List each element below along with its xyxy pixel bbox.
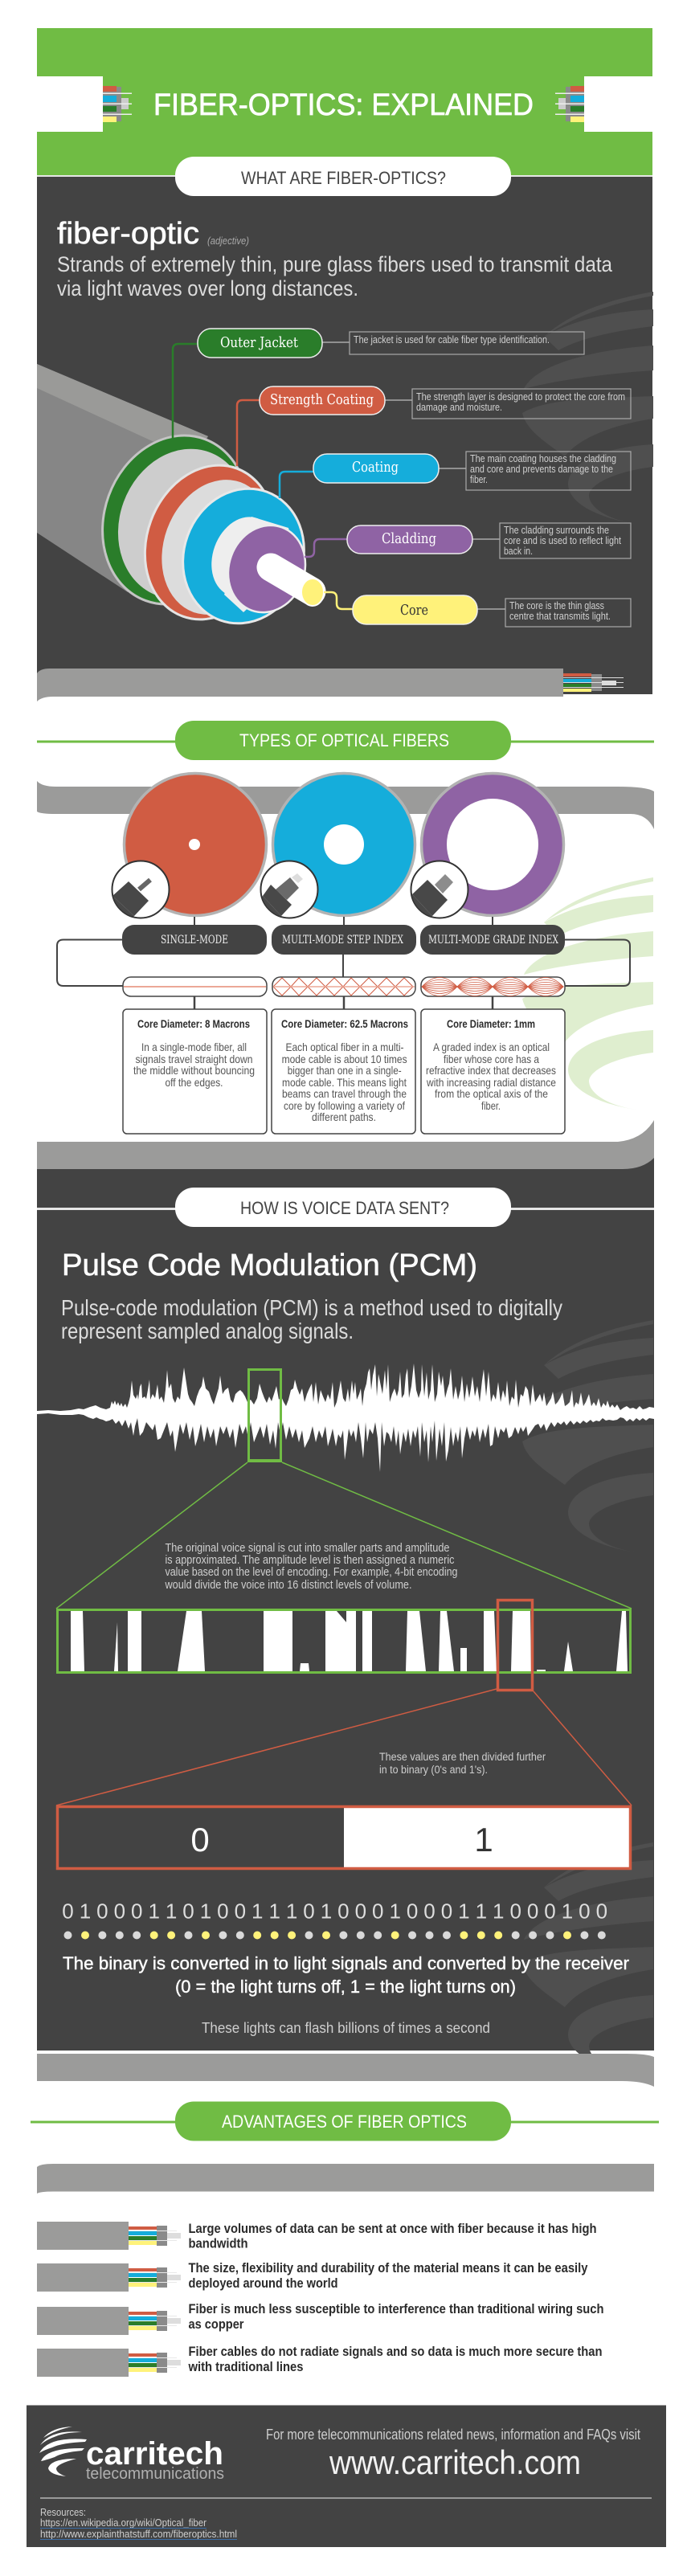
sampled amplitude chart [58,1610,630,1673]
heading: how is voice data sent: HOW IS VOICE DATA SENT? [240,1198,449,1218]
green zoom selection [56,1369,632,1609]
binary digits: 1 [458,1899,470,1924]
resources: Resources: [40,2506,86,2518]
panel: what are fiber-optics [37,157,653,701]
text box: graded index: A graded index is an optical [433,1041,550,1053]
light signal dots [64,1932,606,1940]
red zoom selection [56,1601,632,1805]
label: multi-mode grade index [420,925,565,955]
text box: step index: different paths. [312,1110,376,1123]
text box: graded index: Core Diameter: 1mm [447,1017,535,1030]
binary digits: 0 [96,1899,108,1924]
binary digits: 0 [337,1899,350,1924]
text box: single-mode: In a single-mode fiber, all [141,1041,247,1053]
definition heading: (adjective) [207,235,249,247]
advantage 1: bandwidth [188,2237,247,2251]
binary digits: 0 [441,1899,452,1924]
advantage 4: Fiber cables do not radiate signals and so data is much more secure than [188,2345,603,2359]
text box: single-mode [123,1009,267,1134]
text box: single-mode: Core Diameter: 8 Macrons [137,1017,250,1030]
binary digits: 0 [235,1899,246,1924]
label: outer jacket: Outer Jacket [220,334,299,351]
binary box [58,1806,631,1869]
advantage 1 [37,2222,596,2251]
label: strength coating [260,386,385,415]
title banner [37,28,652,175]
fiber cross-section circles [124,773,564,916]
text box: graded index: from the optical axis of the [435,1087,548,1100]
binary digits: 1 [321,1899,332,1924]
label: single-mode [122,925,267,955]
description: core: centre that transmits light. [509,611,611,622]
binary digits: 0 [407,1899,418,1924]
text box: step index: Each optical fiber in a multi- [286,1041,404,1053]
binary digits: 0 [423,1899,436,1924]
resources [40,2506,237,2540]
pcm title: Pulse Code Modulation (PCM) [62,1249,477,1282]
binary digits: 1 [200,1899,211,1924]
binary digits: 0 [131,1899,142,1924]
resources: https://en.wikipedia.org/wiki/Optical_fiber [40,2517,207,2529]
label: multi-mode step index: MULTI-MODE STEP INDEX [282,934,403,947]
icon: step-index lens [260,860,318,919]
pcm description: represent sampled analog signals. [61,1319,354,1343]
description: cladding [500,523,631,558]
heading: types of optical fibers: TYPES OF OPTICAL FIBERS [239,730,449,750]
binary digits: 1 [251,1899,263,1924]
binary digits: 0 [509,1899,521,1924]
binary digits: 0 [62,1899,74,1924]
label: strength coating: Strength Coating [270,391,374,408]
heading: what are fiber-optics [175,157,511,196]
panel: types of optical fibers [37,773,654,1134]
website: www.carritech.com [329,2443,581,2481]
description: cladding: core and is used to reflect light [504,535,621,546]
text box: step index: mode cable is about 10 times [282,1053,407,1065]
description: core: The core is the thin glass [509,600,604,611]
explanation: voice signal: is approximated. The amplitude level is then assigned a numeric [166,1553,455,1567]
cable cross-section diagram [37,364,324,640]
definition text: Strands of extremely thin, pure glass fibers used to transmit data [57,252,613,276]
description: outer jacket [350,332,584,354]
binary box: 0 [190,1821,210,1858]
binary conclusion [63,1953,629,1997]
heading: what are fiber-optics: WHAT ARE FIBER-OPTICS? [241,168,446,188]
label: cladding [347,525,472,554]
text box: step index: bigger than one in a single- [288,1064,402,1077]
icon: graded-index lens [410,860,469,919]
heading: types of optical fibers [37,721,654,760]
binary digits: 1 [148,1899,160,1924]
definition text: via light waves over long distances. [57,276,358,301]
binary digits: 0 [182,1899,194,1924]
cable strip [37,669,624,701]
label: core: Core [400,602,428,619]
logo: carritech [86,2436,223,2472]
description: coating [466,452,631,490]
text box: single-mode: signals travel straight down [135,1053,252,1065]
binary digits: 0 [303,1899,315,1924]
binary digits: 0 [544,1899,556,1924]
text box: step index: core by following a variety of [284,1099,405,1112]
binary digits [62,1899,607,1924]
description: strength coating: damage and moisture. [416,402,502,413]
binary digits: 1 [166,1899,177,1924]
explanation: voice signal: would divide the voice into 16 distinct levels of volume. [165,1578,412,1592]
description: coating: and core and prevents damage to the [470,464,613,475]
definition heading: fiber-optic [57,217,199,251]
text box: graded index: refractive index that decreases [426,1064,556,1077]
binary digits: 0 [527,1899,538,1924]
advantage 3: Fiber is much less susceptible to interference than traditional wiring such [188,2302,604,2316]
text box: single-mode: off the edges. [166,1076,223,1089]
description: cladding: The cladding surrounds the [504,525,609,536]
explanation: voice signal [165,1541,458,1592]
binary digits: 1 [268,1899,280,1924]
heading: advantages of fiber optics [31,2102,659,2141]
pcm description [61,1295,562,1343]
explanation: binary: These values are then divided further [379,1751,546,1763]
label: cladding: Cladding [382,530,436,547]
explanation: voice signal: The original voice signal is cut into smaller parts and amplitude [166,1541,450,1555]
binary digits: 0 [355,1899,366,1924]
advantage 4: with traditional lines [188,2360,304,2374]
label: multi-mode grade index: MULTI-MODE GRADE INDEX [428,934,558,947]
label: multi-mode step index [272,925,416,955]
advantage 4 [37,2345,603,2377]
binary digits: 0 [114,1899,125,1924]
binary conclusion: The binary is converted in to light signals and converted by the receiver [63,1953,629,1973]
waveform [37,1364,654,1472]
binary digits: 1 [286,1899,297,1924]
signal path: single-mode [123,977,267,996]
logo [39,2427,224,2483]
advantage 3 [37,2302,604,2335]
explanation: voice signal: value based on the level of encoding. For example, 4-bit encoding [166,1565,458,1579]
binary digits: 0 [579,1899,591,1924]
signal path: step index [272,977,415,996]
explanation: binary: in to binary (0's and 1's). [379,1764,488,1776]
advantage 2: The size, flexibility and durability of the material means it can be easily [188,2261,588,2275]
icon: single-mode lens [111,860,170,919]
binary digits: 1 [389,1899,401,1924]
advantage 3: as copper [188,2317,244,2332]
text box: step index: mode cable. This means light [282,1076,407,1089]
resources: http://www.explainthatstuff.com/fiberoptics.html [40,2528,237,2540]
pcm description: Pulse-code modulation (PCM) is a method used to digitally [61,1295,562,1320]
label: coating: Coating [352,459,399,476]
heading: how is voice data sent [175,1188,511,1227]
panel: how is voice data sent [37,1120,654,2075]
text box: step index: beams can travel through the [282,1087,407,1100]
definition heading [57,217,249,251]
binary conclusion: (0 = the light turns off, 1 = the light turns on) [175,1977,516,1997]
note: flash speed: These lights can flash billions of times a second [202,2020,490,2036]
text box: graded index: with increasing radial distance [426,1076,556,1089]
description: core [505,599,631,627]
explanation: binary [379,1751,546,1776]
binary box: 1 [474,1821,493,1858]
advantage 2 [37,2261,588,2292]
advantage 1: Large volumes of data can be sent at once with fiber because it has high [188,2222,596,2236]
description: strength coating [412,389,631,419]
label: single-mode: SINGLE-MODE [161,934,228,947]
description: strength coating: The strength layer is designed to protect the core from [416,391,625,403]
text box: single-mode: the middle without bouncing [133,1064,255,1077]
binary digits: 1 [562,1899,573,1924]
binary digits: 1 [476,1899,487,1924]
definition text [57,252,613,301]
description: outer jacket: The jacket is used for cable fiber type identification. [354,334,550,346]
binary digits: 0 [372,1899,383,1924]
footer panel [27,2406,666,2547]
binary digits: 1 [493,1899,504,1924]
title: FIBER-OPTICS: EXPLAINED [153,88,534,122]
logo: telecommunications [86,2465,224,2483]
binary digits: 0 [217,1899,229,1924]
binary digits: 0 [596,1899,607,1924]
description: cladding: back in. [504,546,533,557]
label: coating [313,454,439,483]
text box: graded index: fiber. [481,1099,501,1112]
connector lines [57,917,630,1009]
description: coating: The main coating houses the cladding [470,453,616,464]
label: core [353,595,477,624]
text box: step index [272,1009,415,1134]
description: coating: fiber. [470,474,488,485]
cable strip [37,2054,654,2087]
text box: graded index [421,1009,565,1134]
text box: step index: Core Diameter: 62.5 Macrons [281,1017,408,1030]
heading: advantages of fiber optics: ADVANTAGES OF FIBER OPTICS [222,2112,467,2132]
connector lines [173,342,505,609]
label: outer jacket [198,329,322,358]
cable strip [37,2164,654,2194]
advantage 2: deployed around the world [188,2276,337,2291]
text box: graded index: fiber whose core has a [444,1053,539,1065]
signal path: graded index [421,977,565,996]
binary digits: 1 [80,1899,91,1924]
